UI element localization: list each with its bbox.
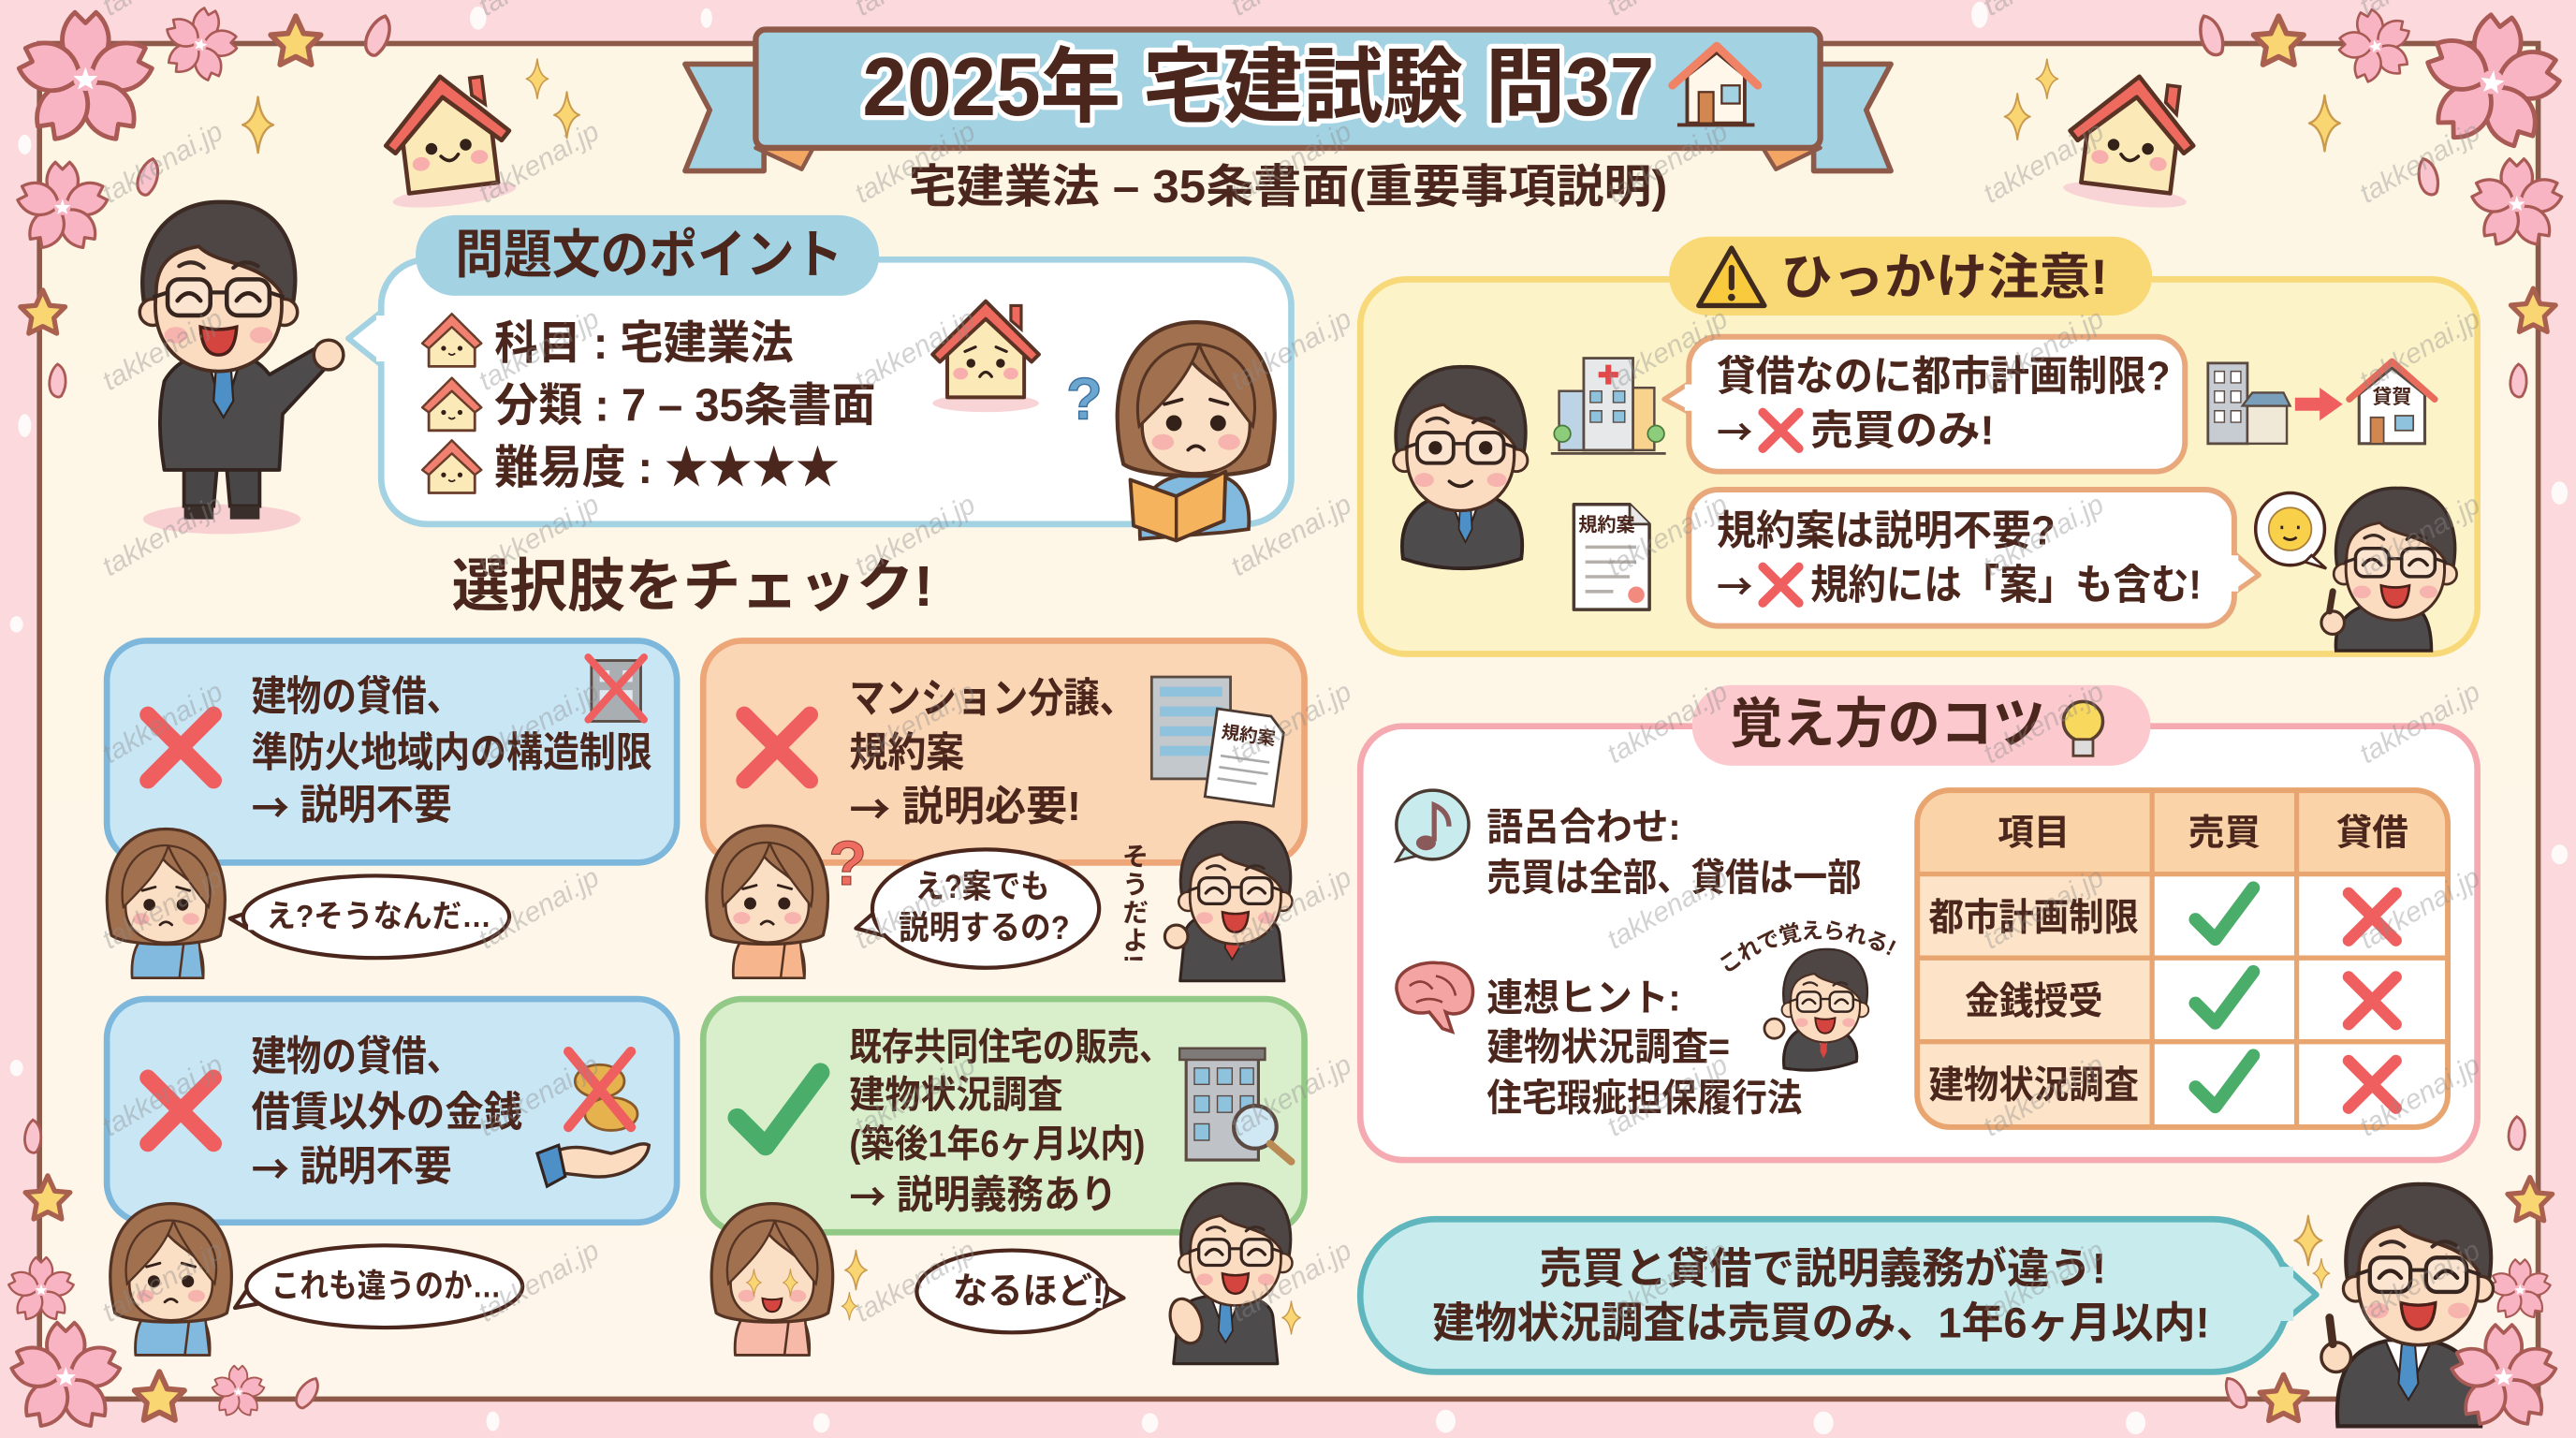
row: 都市計画制限 bbox=[1928, 888, 2396, 941]
heading pill bbox=[416, 215, 879, 296]
vertical note: そうだよ: そうだよ! bbox=[1120, 843, 1149, 964]
watermarks: takkenai.jp bbox=[97, 116, 228, 210]
icon: brain bbox=[1397, 962, 1473, 1032]
text: 連想ヒント bbox=[1486, 976, 1802, 1119]
teacher reaction 2 bbox=[1164, 822, 1292, 981]
icon: buildings to rental house bbox=[2208, 361, 2435, 444]
watermarks: takkenai.jp bbox=[97, 1049, 228, 1143]
row: 都市計画制限: 都市計画制限 bbox=[1928, 895, 2139, 938]
watermarks: takkenai.jp bbox=[2354, 1049, 2485, 1143]
icon: worried house bbox=[932, 301, 1039, 412]
watermarks: takkenai.jp bbox=[474, 676, 605, 770]
row: 金銭授受 bbox=[1965, 972, 2396, 1024]
student reaction 2: ? bbox=[828, 829, 867, 899]
card text: (築後1年6ヶ月以内) bbox=[849, 1122, 1145, 1165]
watermarks: takkenai.jp bbox=[850, 116, 981, 210]
watermarks: takkenai.jp bbox=[97, 862, 228, 955]
watermarks: takkenai.jp bbox=[850, 1235, 981, 1328]
card 3: 金銭 bbox=[107, 999, 677, 1223]
row: 建物状況調査 bbox=[1928, 1055, 2396, 1108]
subtitle: 宅建業法 – 35条書面(重要事項説明) bbox=[909, 162, 1667, 213]
title ribbon bbox=[685, 30, 1891, 171]
watermarks: takkenai.jp bbox=[1226, 489, 1357, 582]
summary bubble bbox=[1360, 1219, 2317, 1372]
arc text: これで覚えられる: これで覚えられる! bbox=[1720, 920, 1896, 972]
corner decoration: bottom left bbox=[7, 1120, 323, 1431]
icon: question mark: ? bbox=[1066, 366, 1103, 432]
panel: 覚え方のコツ bbox=[1357, 685, 2481, 1163]
watermarks: takkenai.jp bbox=[1978, 862, 2109, 955]
watermarks: takkenai.jp bbox=[2354, 862, 2485, 955]
icon: red cross bbox=[744, 714, 810, 781]
table header: 貸借 bbox=[2336, 813, 2408, 853]
watermarks: takkenai.jp bbox=[474, 1235, 605, 1328]
card text: → 説明不要 bbox=[252, 1137, 452, 1196]
icon: coins crossed bbox=[568, 1051, 637, 1130]
icon: apartment and document bbox=[1151, 677, 1285, 806]
summary text: 建物状況調査は売買のみ、1年6ヶ月以内! bbox=[1432, 1299, 2210, 1346]
icon: red cross bbox=[148, 714, 213, 781]
watermarks: takkenai.jp bbox=[1602, 489, 1733, 582]
watermarks: takkenai.jp bbox=[1978, 1049, 2109, 1143]
card text bbox=[252, 674, 652, 835]
card text: 準防火地域内の構造制限 bbox=[252, 729, 652, 775]
heading text: ひっかけ注意! bbox=[1781, 250, 2108, 305]
watermarks: takkenai.jp bbox=[1226, 116, 1357, 210]
watermarks: takkenai.jp bbox=[850, 1049, 981, 1143]
comparison table bbox=[1917, 790, 2448, 1127]
callout 1: → bbox=[1717, 404, 1753, 457]
corner decoration: top right bbox=[2194, 1, 2571, 397]
heading text: 問題文のポイント bbox=[455, 226, 842, 285]
speech bubble 2: 説明するの? bbox=[899, 910, 1070, 946]
watermarks: takkenai.jp bbox=[1602, 303, 1733, 397]
icon: music note bubble bbox=[1397, 790, 1469, 861]
speech bubble 4 bbox=[916, 1251, 1123, 1332]
card text: 既存共同住宅の販売、 bbox=[849, 1025, 1171, 1068]
card 4: 建物状況調査 bbox=[703, 999, 1305, 1232]
table header bbox=[1998, 813, 2408, 853]
student reaction 3 bbox=[110, 1204, 231, 1355]
watermarks: takkenai.jp bbox=[850, 676, 981, 770]
watermarks: takkenai.jp bbox=[474, 116, 605, 210]
summary text: 売買と貸借で説明義務が違う! bbox=[1540, 1244, 2106, 1292]
watermarks: takkenai.jp bbox=[97, 1235, 228, 1328]
title text: 2025年 宅建試験 問37 bbox=[862, 41, 1654, 133]
student reaction 1 bbox=[107, 829, 225, 978]
card text bbox=[252, 1034, 522, 1196]
teacher character pointing bbox=[139, 202, 344, 534]
teacher reaction 4 bbox=[1164, 1183, 1300, 1364]
icon: apartment and document: 規約案 bbox=[1220, 722, 1277, 750]
teacher pointing bbox=[2321, 488, 2457, 651]
card text: 借賃以外の金銭 bbox=[252, 1090, 522, 1136]
speech bubble 2: え?案でも bbox=[915, 869, 1050, 905]
panel: 問題文のポイント bbox=[348, 215, 1292, 540]
watermarks: takkenai.jp bbox=[1602, 1049, 1733, 1143]
watermarks: takkenai.jp bbox=[474, 862, 605, 955]
ribbon tail right bbox=[1814, 64, 1891, 171]
speech bubble 4: なるほど! bbox=[953, 1271, 1104, 1312]
card text: → 説明不要 bbox=[252, 775, 452, 835]
section heading: 選択肢をチェック: 選択肢をチェック! bbox=[452, 554, 933, 619]
card 1: 構造制限 bbox=[107, 640, 677, 862]
watermarks: takkenai.jp bbox=[2354, 1235, 2485, 1328]
watermarks: takkenai.jp bbox=[1226, 676, 1357, 770]
panel: ひっかけ注意 bbox=[1360, 237, 2478, 654]
watermarks: takkenai.jp bbox=[1226, 862, 1357, 955]
watermarks: takkenai.jp bbox=[474, 489, 605, 582]
watermarks: takkenai.jp bbox=[1602, 676, 1733, 770]
corner decoration: top left bbox=[15, 0, 395, 397]
speech bubble 3: これも違うのか… bbox=[271, 1269, 501, 1305]
icon: house in title bbox=[1673, 46, 1758, 125]
watermarks: takkenai.jp bbox=[2354, 676, 2485, 770]
icon: draft document: 規約案 bbox=[1578, 515, 1635, 536]
watermarks: takkenai.jp bbox=[1226, 1049, 1357, 1143]
watermarks: takkenai.jp bbox=[1602, 862, 1733, 955]
watermarks: takkenai.jp bbox=[1602, 1235, 1733, 1328]
watermarks: takkenai.jp bbox=[1978, 1235, 2109, 1328]
icon: draft document bbox=[1573, 505, 1649, 609]
card text: → 説明義務あり bbox=[849, 1166, 1117, 1223]
card text: → 説明必要! bbox=[849, 777, 1081, 837]
icon: warning bbox=[1699, 248, 1764, 305]
watermarks: takkenai.jp bbox=[1602, 116, 1733, 210]
text: 連想ヒント: 連想ヒント: bbox=[1486, 976, 1680, 1019]
row: 科目: 科目 : 宅建業法 bbox=[494, 318, 794, 369]
card text: 建物の貸借、 bbox=[252, 674, 461, 720]
watermarks: takkenai.jp bbox=[474, 303, 605, 397]
watermarks: takkenai.jp bbox=[97, 676, 228, 770]
watermarks: takkenai.jp bbox=[2354, 116, 2485, 210]
card text: マンション分譲、 bbox=[849, 675, 1135, 721]
text: 語呂合わせ: 売買は全部、貸借は一部 bbox=[1486, 856, 1862, 899]
house mascot left with sparkles bbox=[242, 59, 579, 213]
summary text bbox=[1432, 1244, 2210, 1346]
callout 2: 規約には「案」も含む! bbox=[1810, 562, 2202, 608]
row: 金銭授受: 金銭授受 bbox=[1965, 979, 2102, 1022]
card 2: 規約案 bbox=[703, 640, 1305, 862]
icon: red cross bbox=[148, 1078, 213, 1143]
heading pill bbox=[1692, 685, 2150, 766]
card text: 建物の貸借、 bbox=[252, 1034, 461, 1079]
teacher bust bbox=[1394, 367, 1528, 568]
watermarks: takkenai.jp bbox=[1978, 303, 2109, 397]
text: 語呂合わせ: 語呂合わせ: bbox=[1486, 805, 1680, 848]
table header: 項目 bbox=[1998, 813, 2070, 853]
card text bbox=[849, 1025, 1171, 1223]
table header: 売買 bbox=[2188, 813, 2261, 853]
watermarks: takkenai.jp bbox=[1978, 676, 2109, 770]
watermarks: takkenai.jp bbox=[1226, 1235, 1357, 1328]
student reaction 4 bbox=[711, 1204, 867, 1355]
icon: hospital bbox=[1551, 359, 1666, 453]
callout 1: 貸借なのに都市計画制限? bbox=[1717, 353, 2170, 399]
teacher summary character bbox=[2294, 1184, 2559, 1430]
watermarks: takkenai.jp bbox=[2354, 303, 2485, 397]
text: 連想ヒント: 建物状況調査= bbox=[1486, 1025, 1730, 1068]
text: 語呂合わせ bbox=[1486, 805, 1862, 899]
text: 連想ヒント: 住宅瑕疵担保履行法 bbox=[1486, 1076, 1802, 1119]
callout 1: 売買のみ! bbox=[1810, 407, 1995, 453]
speech bubble 1: え?そうなんだ… bbox=[266, 900, 491, 934]
card text: 規約案 bbox=[849, 729, 964, 775]
watermarks: takkenai.jp bbox=[1226, 303, 1357, 397]
card text bbox=[849, 675, 1135, 837]
ribbon tail left bbox=[685, 64, 764, 171]
icon: green check bbox=[738, 1073, 820, 1146]
icon: building with magnifier bbox=[1179, 1049, 1292, 1162]
watermarks: takkenai.jp bbox=[850, 862, 981, 955]
heading text: 覚え方のコツ bbox=[1730, 695, 2045, 755]
watermarks: takkenai.jp bbox=[474, 1049, 605, 1143]
house mascot right with sparkles bbox=[2005, 59, 2340, 213]
thought bubble with emoji bbox=[2256, 493, 2326, 568]
row: 建物状況調査: 建物状況調査 bbox=[1928, 1063, 2139, 1106]
watermarks: takkenai.jp bbox=[97, 303, 228, 397]
corner decoration: bottom right bbox=[2220, 1117, 2553, 1420]
student reading book bbox=[1118, 322, 1275, 540]
watermarks: takkenai.jp bbox=[1978, 116, 2109, 210]
watermarks: takkenai.jp bbox=[850, 489, 981, 582]
card text: 建物状況調査 bbox=[849, 1073, 1063, 1116]
watermarks: takkenai.jp bbox=[850, 303, 981, 397]
speech bubble 3 bbox=[235, 1245, 522, 1328]
small teacher bbox=[1764, 949, 1868, 1070]
callout 2: 規約案は説明不要? bbox=[1717, 507, 2056, 553]
callout 2 bbox=[1689, 490, 2259, 626]
row: 分類: 分類 : 7 – 35条書面 bbox=[494, 380, 875, 431]
callout 2: → bbox=[1717, 559, 1753, 611]
icon: hand bbox=[537, 1144, 649, 1186]
icon: buildings to rental house: 貸賀 bbox=[2372, 386, 2411, 408]
icon: light bulb bbox=[2063, 701, 2102, 756]
callout 1 bbox=[1664, 337, 2185, 472]
watermarks: takkenai.jp bbox=[1978, 489, 2109, 582]
watermarks: takkenai.jp bbox=[2354, 489, 2485, 582]
heading pill bbox=[1669, 237, 2152, 315]
row: 難易度: 難易度 : ★★★★ bbox=[494, 443, 840, 493]
watermarks: takkenai.jp bbox=[97, 489, 228, 582]
speech bubble 2 bbox=[856, 849, 1099, 968]
student reaction 2 bbox=[707, 826, 867, 978]
icon: crossed building bbox=[588, 657, 644, 721]
speech bubble 1 bbox=[230, 875, 509, 958]
